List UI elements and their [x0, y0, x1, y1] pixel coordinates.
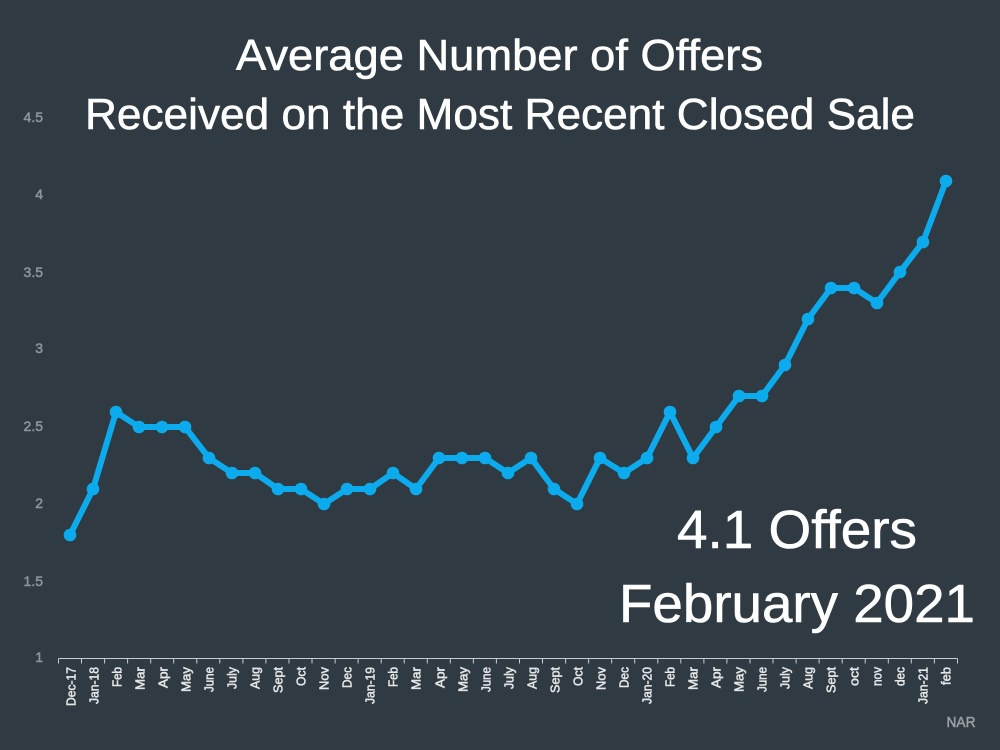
callout: 4.1 offers February 2021: 4.1 Offers	[677, 500, 917, 560]
x axis month labels: oct	[848, 666, 862, 686]
x axis month labels: Jan-20	[641, 667, 655, 704]
x axis month labels: Dec-17	[65, 667, 79, 706]
y axis labels: 4	[35, 186, 43, 202]
x axis month labels: Feb	[664, 667, 678, 687]
x axis month labels: June	[480, 667, 494, 692]
x axis month labels: Oct	[572, 666, 586, 686]
x axis month labels: Apr	[157, 667, 171, 688]
x axis month labels: Aug	[526, 667, 540, 689]
y axis labels: 1	[35, 649, 43, 665]
x axis month labels: Jan-21	[917, 667, 931, 704]
y axis labels: 2.5	[24, 418, 43, 434]
x axis month labels: May	[457, 666, 471, 692]
source label: NAR	[946, 714, 976, 731]
x axis month labels: Jan-19	[364, 667, 378, 704]
x axis month labels: Aug	[249, 667, 263, 689]
x axis month labels: Nov	[595, 666, 609, 690]
x axis month labels: Feb	[387, 667, 401, 687]
x axis month labels: May	[180, 666, 194, 692]
x axis month labels: dec	[894, 667, 908, 686]
title: Average Number of Offers	[236, 31, 763, 80]
x axis month labels	[65, 666, 954, 706]
y axis labels: 3.5	[24, 264, 43, 280]
x axis month labels: July	[779, 666, 793, 689]
x axis month labels: Sept	[549, 666, 563, 693]
x axis month labels: Dec	[618, 667, 632, 688]
y axis labels: 3	[35, 340, 43, 356]
x axis month labels: Apr	[710, 667, 724, 688]
x axis month labels: Nov	[318, 666, 332, 690]
title: Received on the Most Recent Closed Sale	[85, 90, 915, 139]
x axis month labels: Apr	[434, 667, 448, 688]
title	[85, 31, 915, 139]
x axis month labels: feb	[940, 667, 954, 685]
y axis labels	[24, 109, 43, 665]
x axis month labels: Mar	[134, 667, 148, 690]
x axis month labels: Sept	[825, 666, 839, 693]
x axis month labels: Mar	[410, 667, 424, 690]
line chart: average number of offers	[64, 175, 952, 541]
x axis line and ticks	[58, 658, 958, 664]
x axis month labels: July	[503, 666, 517, 689]
x axis month labels: nov	[871, 666, 885, 686]
x axis month labels: Oct	[295, 666, 309, 686]
x axis month labels: Dec	[341, 667, 355, 688]
y axis labels: 4.5	[24, 109, 43, 125]
x axis month labels: Mar	[687, 667, 701, 690]
x axis month labels: Sept	[272, 666, 286, 693]
x axis month labels: May	[733, 666, 747, 692]
x axis month labels: June	[203, 667, 217, 692]
y axis labels: 2	[35, 495, 43, 511]
y axis labels: 1.5	[24, 573, 43, 589]
x axis month labels: Jan-18	[88, 667, 102, 704]
x axis month labels: July	[226, 666, 240, 689]
x axis month labels: Feb	[111, 667, 125, 687]
callout: 4.1 offers February 2021	[619, 500, 975, 634]
x axis month labels: Aug	[802, 667, 816, 689]
callout: 4.1 offers February 2021: February 2021	[619, 574, 975, 634]
x axis month labels: June	[756, 667, 770, 692]
